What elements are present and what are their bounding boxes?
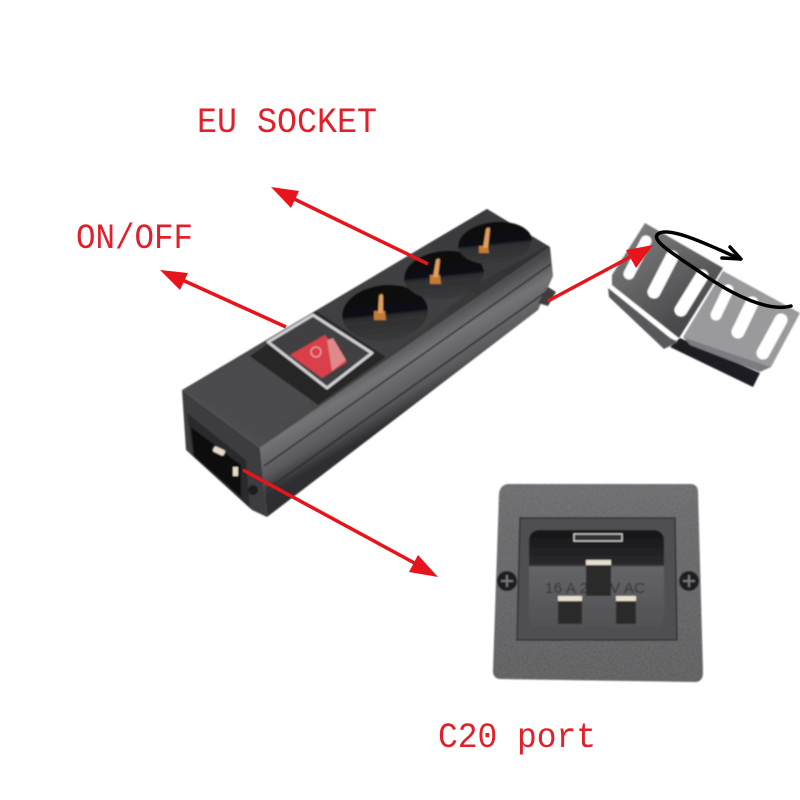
- arrow: C20 port: [243, 470, 438, 577]
- strip rear bracket: [538, 287, 556, 306]
- socket 3: [456, 218, 534, 268]
- strip front face: [182, 390, 267, 517]
- heading: C20 port: C20 port: [438, 718, 596, 758]
- port window: [529, 530, 664, 627]
- bracket slots: [629, 241, 781, 353]
- socket 1: [339, 281, 431, 345]
- C20 port close-up: [493, 484, 703, 682]
- switch recess: [250, 311, 386, 405]
- bracket base: [670, 338, 760, 387]
- strip side face: [260, 247, 553, 517]
- port rating marking: 16 A 250 V AC: [545, 580, 645, 597]
- rotation arrow: [656, 232, 791, 307]
- bracket lower strip: [608, 288, 678, 349]
- power strip: [182, 209, 556, 517]
- bracket right plate: [683, 271, 800, 367]
- bracket left plate: [612, 223, 723, 338]
- heading: EU SOCKET: EU SOCKET: [197, 103, 377, 143]
- C20 inlet on strip: [187, 413, 258, 508]
- port pins: [558, 560, 636, 624]
- arrow: ON/OFF: [160, 270, 286, 327]
- rocker switch with clear cover: [268, 315, 372, 388]
- port frame: [517, 518, 677, 640]
- socket 2: [402, 247, 486, 303]
- strip top face: [182, 209, 550, 448]
- blank panel: [190, 356, 312, 438]
- bracket detail: [608, 223, 800, 387]
- arrow: EU socket: [271, 187, 428, 264]
- port latch: [574, 534, 622, 541]
- socket plates: [316, 245, 484, 357]
- arrow: bracket: [548, 245, 653, 301]
- heading: ON/OFF: ON/OFF: [76, 219, 193, 259]
- left screw: [497, 571, 517, 591]
- port plate: [493, 484, 703, 682]
- right screw: [679, 571, 699, 591]
